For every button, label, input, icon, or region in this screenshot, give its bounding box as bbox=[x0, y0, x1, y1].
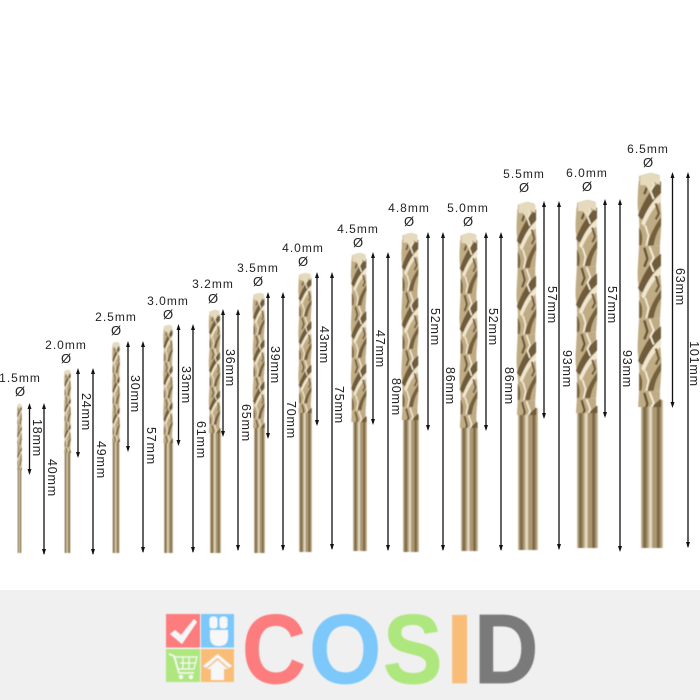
drill 5.5mm: 93mm bbox=[560, 350, 574, 388]
drill 4.0mm bbox=[282, 241, 346, 552]
drill 5.0mm: 86mm bbox=[502, 367, 516, 405]
drill 3.0mm: 3.0mm bbox=[147, 294, 189, 308]
drill 1.5mm: 18mm bbox=[30, 419, 44, 457]
logo wordmark bbox=[242, 594, 538, 700]
drill 6.5mm: Ø bbox=[643, 155, 653, 170]
drill 3.2mm: 65mm bbox=[239, 404, 253, 442]
drill 3.5mm: 3.5mm bbox=[237, 261, 279, 275]
drill 6.5mm bbox=[627, 142, 700, 548]
drill 5.5mm: 57mm bbox=[545, 286, 559, 324]
drill 4.5mm bbox=[337, 222, 403, 551]
drill 6.0mm: 57mm bbox=[605, 286, 619, 324]
drill 3.2mm: 3.2mm bbox=[192, 277, 234, 291]
drill 1.5mm: Ø bbox=[15, 384, 25, 399]
drill 4.5mm: 47mm bbox=[373, 330, 387, 368]
drill 2.0mm: Ø bbox=[61, 351, 71, 366]
drill 3.5mm: Ø bbox=[253, 274, 263, 289]
drill 6.0mm: 93mm bbox=[620, 350, 634, 388]
icon: shopping cart bbox=[166, 649, 200, 682]
drill 1.5mm: 1.5mm bbox=[0, 371, 41, 385]
drill 5.0mm bbox=[447, 201, 516, 551]
drill 1.5mm bbox=[0, 371, 59, 555]
drill 6.0mm: 6.0mm bbox=[566, 166, 608, 180]
drill 4.0mm: 43mm bbox=[317, 326, 331, 364]
drill 5.0mm: 5.0mm bbox=[447, 201, 489, 215]
drill 1.5mm: 40mm bbox=[45, 459, 59, 497]
icon: mouse bbox=[201, 614, 234, 648]
drill 3.5mm bbox=[237, 261, 298, 553]
drill 4.8mm: 86mm bbox=[443, 367, 457, 405]
drill 4.8mm: 52mm bbox=[428, 308, 442, 346]
drill 5.5mm: 5.5mm bbox=[503, 167, 545, 181]
drill 4.8mm bbox=[388, 201, 457, 552]
drill 4.8mm: 4.8mm bbox=[388, 201, 430, 215]
drill 6.0mm bbox=[566, 166, 634, 552]
drill 4.0mm: 75mm bbox=[332, 386, 346, 424]
drill 3.0mm bbox=[147, 294, 208, 553]
drill 4.5mm: 80mm bbox=[389, 378, 403, 416]
icon: house bbox=[201, 649, 234, 682]
drill 2.5mm: 30mm bbox=[128, 375, 142, 413]
drill 6.5mm: 63mm bbox=[673, 268, 687, 306]
drill 2.0mm: 24mm bbox=[79, 393, 93, 431]
drill 4.5mm: 4.5mm bbox=[337, 222, 379, 236]
drill 2.5mm: Ø bbox=[111, 323, 121, 338]
drill 5.5mm bbox=[503, 167, 574, 550]
drill 3.2mm bbox=[192, 277, 253, 553]
icon: check mark bbox=[166, 614, 200, 648]
drill 2.5mm: 57mm bbox=[144, 427, 158, 465]
drill 3.0mm: 33mm bbox=[179, 366, 193, 404]
drill 3.0mm: Ø bbox=[163, 307, 173, 322]
drill 4.5mm: Ø bbox=[353, 235, 363, 250]
drill 5.0mm: Ø bbox=[463, 214, 473, 229]
drill 3.2mm: 36mm bbox=[223, 349, 237, 387]
drill 5.5mm: Ø bbox=[519, 180, 529, 195]
drill 2.0mm bbox=[45, 338, 108, 555]
drill 2.5mm: 2.5mm bbox=[95, 310, 137, 324]
drill 2.5mm bbox=[95, 310, 158, 553]
drill 3.5mm: 39mm bbox=[268, 346, 282, 384]
drill 6.0mm: Ø bbox=[582, 179, 592, 194]
drill 2.0mm: 49mm bbox=[94, 441, 108, 479]
drill 6.5mm: 6.5mm bbox=[627, 142, 669, 156]
drill 4.8mm: Ø bbox=[404, 214, 414, 229]
logo icon grid bbox=[166, 614, 234, 682]
drill 3.2mm: Ø bbox=[208, 291, 218, 306]
drill 3.5mm: 70mm bbox=[284, 401, 298, 439]
footer band bbox=[0, 590, 700, 700]
drill 2.0mm: 2.0mm bbox=[45, 338, 87, 352]
drill 3.0mm: 61mm bbox=[194, 421, 208, 459]
drill 4.0mm: 4.0mm bbox=[282, 241, 324, 255]
drill 4.0mm: Ø bbox=[298, 254, 308, 269]
drill 5.0mm: 52mm bbox=[486, 308, 500, 346]
